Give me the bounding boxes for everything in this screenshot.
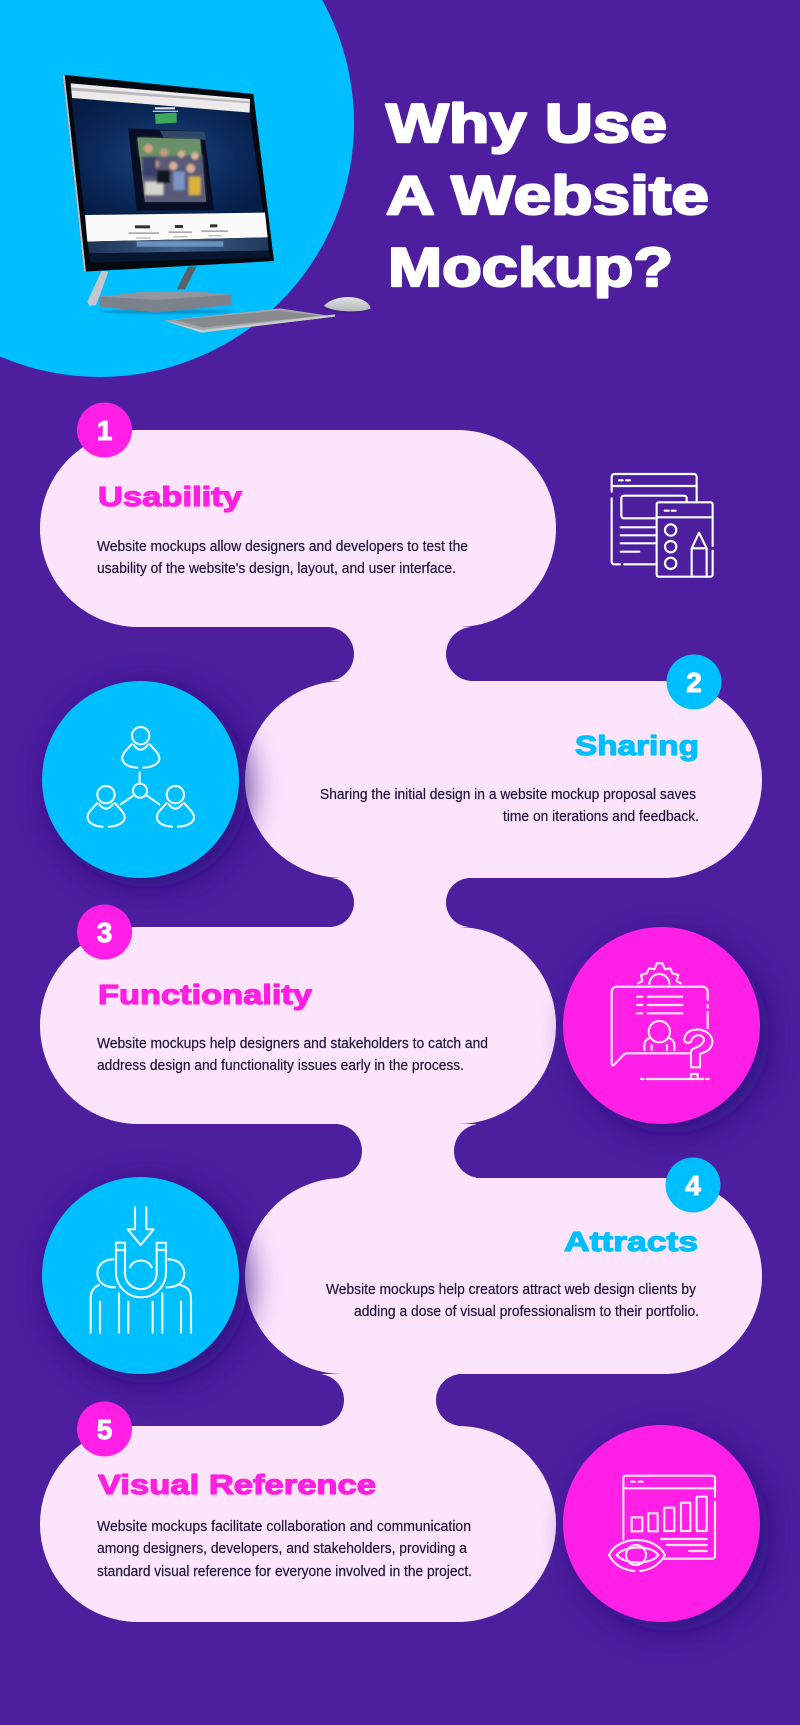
icon: support chat with question mark bbox=[612, 963, 712, 1079]
illustration: desktop computer with keyboard and mouse bbox=[63, 75, 371, 333]
body text: functionality: Website mockups help designers and stakeholders to catch and bbox=[97, 1036, 488, 1052]
icon: magnet attracting people bbox=[91, 1207, 191, 1333]
connector 1 bbox=[0, 627, 800, 681]
panel: visual reference bbox=[40, 1402, 556, 1622]
badge 1 bbox=[77, 402, 132, 458]
body text: functionality: address design and functionality issues early in the process. bbox=[97, 1058, 464, 1074]
body text: attracts: Website mockups help creators attract web design clients by bbox=[326, 1282, 697, 1298]
connector 3 bbox=[0, 1124, 800, 1178]
body text: visual reference: standard visual reference for everyone involved in the project. bbox=[97, 1564, 472, 1580]
connector 4 bbox=[0, 1374, 800, 1426]
body text: sharing: time on iterations and feedback. bbox=[503, 809, 699, 825]
body text: visual reference bbox=[97, 1519, 472, 1580]
icon circle: sharing network bbox=[42, 681, 248, 887]
title bbox=[386, 92, 709, 298]
badge 5: 5 bbox=[97, 1414, 112, 1445]
body text: visual reference: among designers, developers, and stakeholders, providing a bbox=[97, 1541, 467, 1557]
body text: sharing bbox=[320, 787, 699, 825]
header cyan circle bbox=[0, 0, 354, 377]
badge 1: 1 bbox=[97, 415, 112, 446]
panel: usability bbox=[40, 402, 556, 627]
icon: web pages and pencil bbox=[612, 474, 713, 577]
title: A Website bbox=[386, 164, 709, 226]
panel: sharing bbox=[245, 654, 762, 878]
title: Mockup? bbox=[388, 236, 673, 298]
icon circle: visual reference bbox=[563, 1425, 769, 1631]
badge 2: 2 bbox=[686, 667, 702, 698]
icon circle: attract clients bbox=[42, 1177, 248, 1383]
icon: connected people bbox=[88, 727, 194, 827]
panel: functionality bbox=[40, 904, 556, 1124]
body text: attracts bbox=[326, 1282, 699, 1320]
heading: sharing: Sharing bbox=[575, 730, 699, 761]
body text: functionality bbox=[97, 1036, 488, 1074]
heading: attracts: Attracts bbox=[564, 1226, 698, 1257]
title: Why Use bbox=[386, 92, 667, 154]
panel: attracts bbox=[245, 1158, 762, 1374]
body text: visual reference: Website mockups facilitate collaboration and communication bbox=[97, 1519, 471, 1535]
heading: usability: Usability bbox=[98, 481, 243, 512]
body text: attracts: adding a dose of visual professionalism to their portfolio. bbox=[354, 1304, 699, 1320]
badge 3 bbox=[77, 904, 132, 960]
connector 2 bbox=[0, 878, 800, 927]
badge 3: 3 bbox=[97, 917, 112, 948]
body text: usability: usability of the website's design, layout, and user interface. bbox=[97, 561, 456, 577]
badge 5 bbox=[77, 1402, 132, 1456]
badge 4: 4 bbox=[685, 1170, 701, 1201]
icon circle: functionality question bbox=[563, 927, 769, 1133]
heading: visual reference: Visual Reference bbox=[98, 1469, 376, 1500]
badge 2 bbox=[666, 654, 722, 710]
heading: functionality: Functionality bbox=[98, 979, 313, 1010]
body text: usability bbox=[97, 539, 468, 577]
badge 4 bbox=[666, 1158, 720, 1212]
body text: usability: Website mockups allow designers and developers to test the bbox=[97, 539, 468, 555]
icon: chart window with eye bbox=[609, 1476, 715, 1571]
body text: sharing: Sharing the initial design in a website mockup proposal saves bbox=[320, 787, 696, 803]
